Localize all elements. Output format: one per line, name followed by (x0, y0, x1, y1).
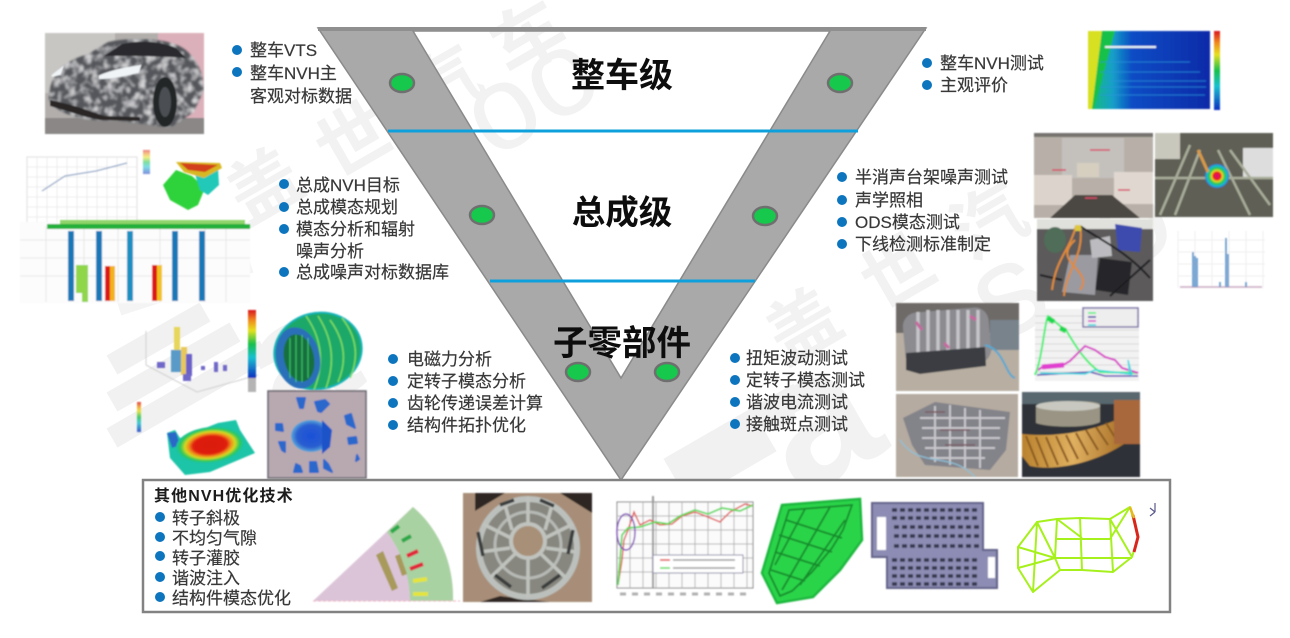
node: assembly left (470, 206, 494, 224)
list: assembly design: 总成噪声对标数据库 (296, 263, 449, 282)
watermark: a (714, 298, 913, 536)
list: assembly design (279, 176, 449, 282)
chart: spectrogram (1088, 31, 1220, 110)
chart: NVH target curve (27, 150, 150, 225)
heading: assembly level: 总成级 (572, 195, 672, 232)
level divider: assembly / component (490, 280, 755, 282)
chart: 3D force bars (137, 327, 258, 432)
V diagram (318, 28, 926, 480)
watermark: 车 (1028, 121, 1130, 226)
photo: helical gear (1022, 392, 1140, 477)
chart: harmonic injection (617, 496, 753, 594)
list: component design: 齿轮传递误差计算 (407, 394, 543, 413)
model: stator housing (266, 303, 370, 399)
chart: torque ripple (1035, 308, 1139, 381)
list: component design: 结构件拓扑优化 (407, 416, 526, 435)
watermark: a (208, 249, 387, 462)
list: assembly test: ODS模态测试 (855, 213, 960, 232)
node: vehicle right (828, 74, 852, 92)
chart: target bars (20, 220, 250, 303)
panel: other NVH optimisation (143, 480, 1170, 612)
node: component right (655, 363, 679, 381)
list: component test: 谐波电流测试 (746, 393, 848, 412)
watermark: soo (941, 138, 1196, 369)
watermark: 盖 (214, 135, 316, 240)
list: vehicle design: 整车NVH主 (250, 64, 337, 83)
watermark: 汽 (393, 34, 495, 139)
watermark: 世 (848, 221, 950, 326)
photo: wired test rig (1037, 219, 1153, 301)
list: vehicle design: 整车VTS (250, 41, 317, 60)
photo: rotor assembly (896, 394, 1018, 477)
watermark (112, 0, 1196, 536)
list: assembly test (837, 168, 1008, 254)
list: vehicle test: 主观评价 (940, 76, 1008, 95)
colour scale (248, 310, 256, 392)
model: topology grid plate (872, 503, 997, 588)
optimisation list: 不均匀气隙 (172, 529, 257, 548)
list: assembly design: 噪声分析 (296, 242, 364, 261)
panel heading: 其他NVH优化技术 (154, 486, 294, 505)
grey V band (318, 28, 926, 480)
photo: semi-anechoic room (1034, 133, 1153, 218)
list: component design: 定转子模态分析 (407, 372, 526, 391)
watermark: 汽 (938, 171, 1040, 276)
optimisation list: 转子斜极 (172, 509, 240, 528)
photo: acoustic camera (1155, 133, 1273, 217)
list: assembly test: 半消声台架噪声测试 (855, 168, 1008, 187)
node: vehicle left (390, 74, 414, 92)
list: component test: 扭矩波动测试 (746, 349, 848, 368)
list: assembly design: 总成NVH目标 (296, 176, 400, 195)
list: vehicle design (232, 41, 352, 106)
list: vehicle test (922, 54, 1044, 95)
optimisation list: 谐波注入 (172, 569, 240, 588)
list: assembly design: 总成模态规划 (296, 198, 398, 217)
photo: potted rotor (463, 493, 592, 602)
photo: camouflaged car (45, 33, 204, 134)
list: component test (730, 349, 865, 434)
watermark: 世 (303, 89, 405, 194)
model: ribbed plate (762, 499, 862, 603)
list: component test: 定转子模态测试 (746, 371, 865, 390)
model: plate vibration (167, 420, 255, 475)
list: assembly test: 下线检测标准制定 (855, 235, 991, 254)
watermark: 盖 (753, 275, 855, 380)
list: component design: 电磁力分析 (407, 350, 492, 369)
watermark: soo (386, 0, 621, 213)
heading: vehicle level: 整车级 (571, 57, 673, 95)
model: powertrain vibration (163, 162, 222, 210)
list: component test: 接触斑点测试 (746, 415, 848, 434)
photo: stator under test (896, 303, 1019, 391)
optimisation list (155, 509, 291, 608)
list: component design (388, 350, 543, 435)
diagram: rotor sector (313, 507, 460, 601)
level divider: vehicle / assembly (388, 130, 858, 132)
list: assembly design: 模态分析和辐射 (296, 220, 415, 239)
chart: noise spectrum (1178, 231, 1265, 288)
list: vehicle design: 客观对标数据 (250, 87, 352, 106)
model: topology optimisation (268, 391, 366, 478)
heading: component level: 子零部件 (553, 325, 691, 363)
model: mode shape mesh (1018, 503, 1155, 592)
node: component left (566, 363, 590, 381)
optimisation list: 结构件模态优化 (172, 589, 291, 608)
list: vehicle test: 整车NVH测试 (940, 54, 1044, 73)
node: assembly right (753, 207, 777, 225)
optimisation list: 转子灌胶 (172, 549, 240, 568)
list: assembly test: 声学照相 (855, 191, 923, 210)
